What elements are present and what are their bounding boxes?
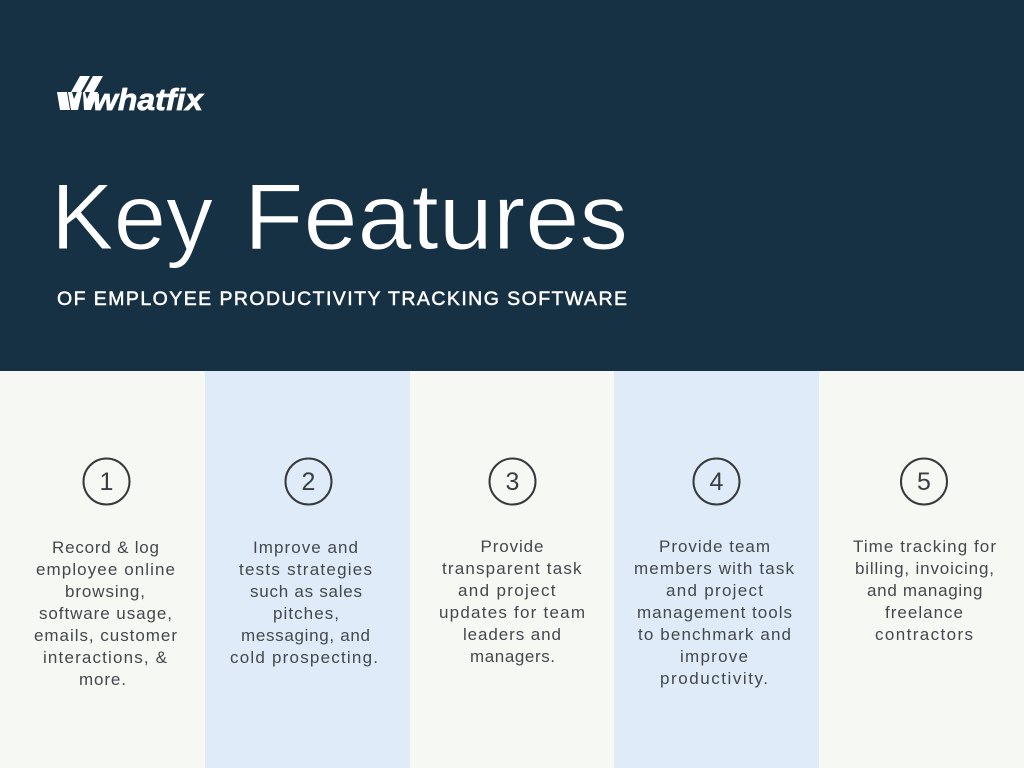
number badge 4: 4 xyxy=(710,468,724,496)
feature 1 text: more. xyxy=(79,670,126,689)
panel: feature 2 xyxy=(205,371,410,768)
feature 1 text: interactions, & xyxy=(43,648,168,667)
feature 2 text: tests strategies xyxy=(239,560,372,579)
title: Key xyxy=(51,164,213,269)
feature 1 text: Record & log xyxy=(52,538,159,557)
logo wordmark: whatfix xyxy=(93,82,205,117)
feature 2 text: messaging, and xyxy=(241,626,370,645)
feature 2 text: pitches, xyxy=(273,604,339,623)
feature 5 text: and managing xyxy=(867,581,982,600)
feature 5 text: billing, invoicing, xyxy=(855,559,994,578)
panel: feature 3 xyxy=(410,371,614,768)
feature 5 text: Time tracking for xyxy=(853,537,996,556)
feature 4 text xyxy=(634,537,794,688)
number badge 3: 3 xyxy=(506,468,519,496)
feature 1 text: emails, customer xyxy=(34,626,177,645)
feature 4 text: improve xyxy=(680,647,748,666)
feature 1 text: browsing, xyxy=(65,582,145,601)
feature 2 text: such as sales xyxy=(250,582,362,601)
feature 2 text: cold prospecting. xyxy=(230,648,378,667)
feature 4 text: to benchmark and xyxy=(638,625,791,644)
feature 3 text xyxy=(439,537,585,666)
number badge 4 xyxy=(694,458,740,504)
number badge 5 xyxy=(901,458,947,504)
feature 1 text: employee online xyxy=(36,560,175,579)
feature 5 text: contractors xyxy=(875,625,973,644)
logo: whatfix xyxy=(57,76,205,117)
feature 3 text: leaders and xyxy=(463,625,561,644)
number badge 3 xyxy=(490,458,536,504)
feature 4 text: members with task xyxy=(634,559,794,578)
panel: feature 4 xyxy=(614,371,819,768)
feature 4 text: Provide team xyxy=(659,537,770,556)
number badge 1: 1 xyxy=(100,468,113,496)
number badge 2 xyxy=(286,458,332,504)
feature 4 text: management tools xyxy=(637,603,792,622)
number badge 5: 5 xyxy=(917,468,931,496)
feature 1 text: software usage, xyxy=(39,604,172,623)
panel: feature 1 xyxy=(0,371,205,768)
subtitle: OF EMPLOYEE PRODUCTIVITY TRACKING SOFTWARE xyxy=(57,288,627,310)
number badge 2: 2 xyxy=(302,468,315,496)
feature 1 text xyxy=(34,538,177,689)
feature 5 text xyxy=(853,537,996,644)
feature 5 text: freelance xyxy=(885,603,963,622)
header band xyxy=(0,0,1024,371)
feature 3 text: updates for team xyxy=(439,603,585,622)
title: Features xyxy=(244,164,628,269)
feature 4 text: productivity. xyxy=(660,669,768,688)
feature 3 text: managers. xyxy=(470,647,555,666)
feature 3 text: transparent task xyxy=(442,559,582,578)
feature 2 text xyxy=(230,538,378,667)
icon: logo mark xyxy=(57,76,103,110)
number badge 1 xyxy=(84,458,130,504)
panel: feature 5 xyxy=(819,371,1024,768)
feature 3 text: Provide xyxy=(480,537,544,556)
feature 2 text: Improve and xyxy=(253,538,358,557)
title xyxy=(51,164,628,269)
feature 3 text: and project xyxy=(458,581,556,600)
feature 4 text: and project xyxy=(666,581,763,600)
